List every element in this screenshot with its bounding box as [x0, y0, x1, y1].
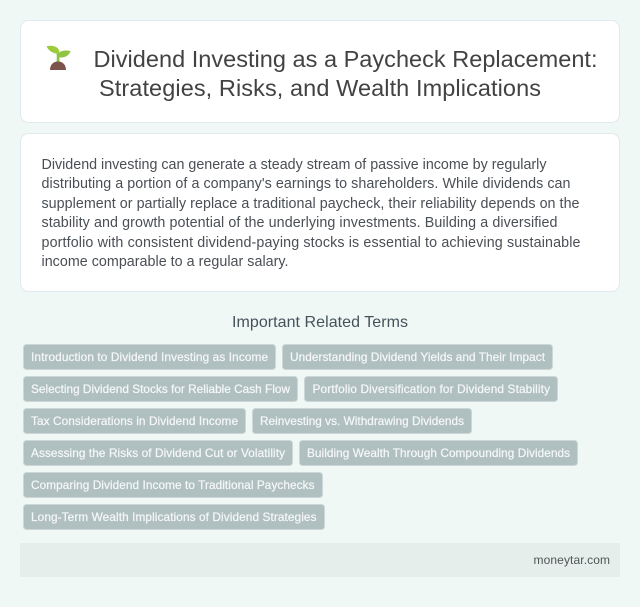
tag: diversification [304, 376, 558, 402]
panel: description card [20, 134, 620, 292]
icon: seedling [47, 46, 71, 70]
tag: yields [282, 344, 552, 370]
text block: description: supplement or partially replace a traditional paycheck, their reliability depends on the [42, 196, 580, 212]
heading: important related terms: Important Related Terms [232, 314, 408, 331]
tag: risks [24, 440, 292, 466]
tag: yields: Understanding Dividend Yields and Their Impact [290, 350, 546, 364]
tag: tax [24, 408, 246, 434]
text block: description [42, 157, 581, 270]
tag: selecting stocks: Selecting Dividend Stocks for Reliable Cash Flow [31, 382, 290, 396]
tag: tax: Tax Considerations in Dividend Income [31, 414, 238, 428]
tag: introduction: Introduction to Dividend Investing as Income [31, 350, 268, 364]
tag: selecting stocks [24, 376, 298, 402]
tag: introduction [24, 344, 276, 370]
heading: title [94, 46, 598, 101]
heading: title: Strategies, Risks, and Wealth Implications [99, 75, 541, 101]
text block: description: Dividend investing can generate a steady stream of passive income by regularly [42, 157, 547, 173]
heading: title: Dividend Investing as a Paycheck Replacement: [94, 46, 598, 72]
tag: risks: Assessing the Risks of Dividend Cut or Volatility [31, 446, 285, 460]
tag: comparing [24, 472, 322, 498]
tag: reinvesting: Reinvesting vs. Withdrawing Dividends [260, 414, 464, 428]
tag: comparing: Comparing Dividend Income to Traditional Paychecks [31, 478, 315, 492]
footer [20, 543, 620, 577]
text block: description: stability and growth potential of the underlying investments. Building a diversified [42, 215, 558, 231]
panel: title card [20, 20, 620, 122]
tag: compounding [300, 440, 578, 466]
text block: description: income comparable to a regular salary. [42, 254, 288, 270]
text block: description: distributing a portion of a company's earnings to shareholders. While dividends can [42, 176, 571, 192]
tag: long-term: Long-Term Wealth Implications of Dividend Strategies [31, 510, 317, 524]
tag: diversification: Portfolio Diversification for Dividend Stability [312, 382, 550, 396]
tag: long-term [24, 504, 324, 530]
list: related term tags [24, 344, 578, 530]
footer: source text: moneytar.com [534, 553, 610, 567]
text block: description: portfolio with consistent dividend-paying stocks is essential to achieving sustainable [42, 235, 581, 251]
tag: compounding: Building Wealth Through Compounding Dividends [307, 446, 570, 460]
tag: reinvesting [252, 408, 472, 434]
